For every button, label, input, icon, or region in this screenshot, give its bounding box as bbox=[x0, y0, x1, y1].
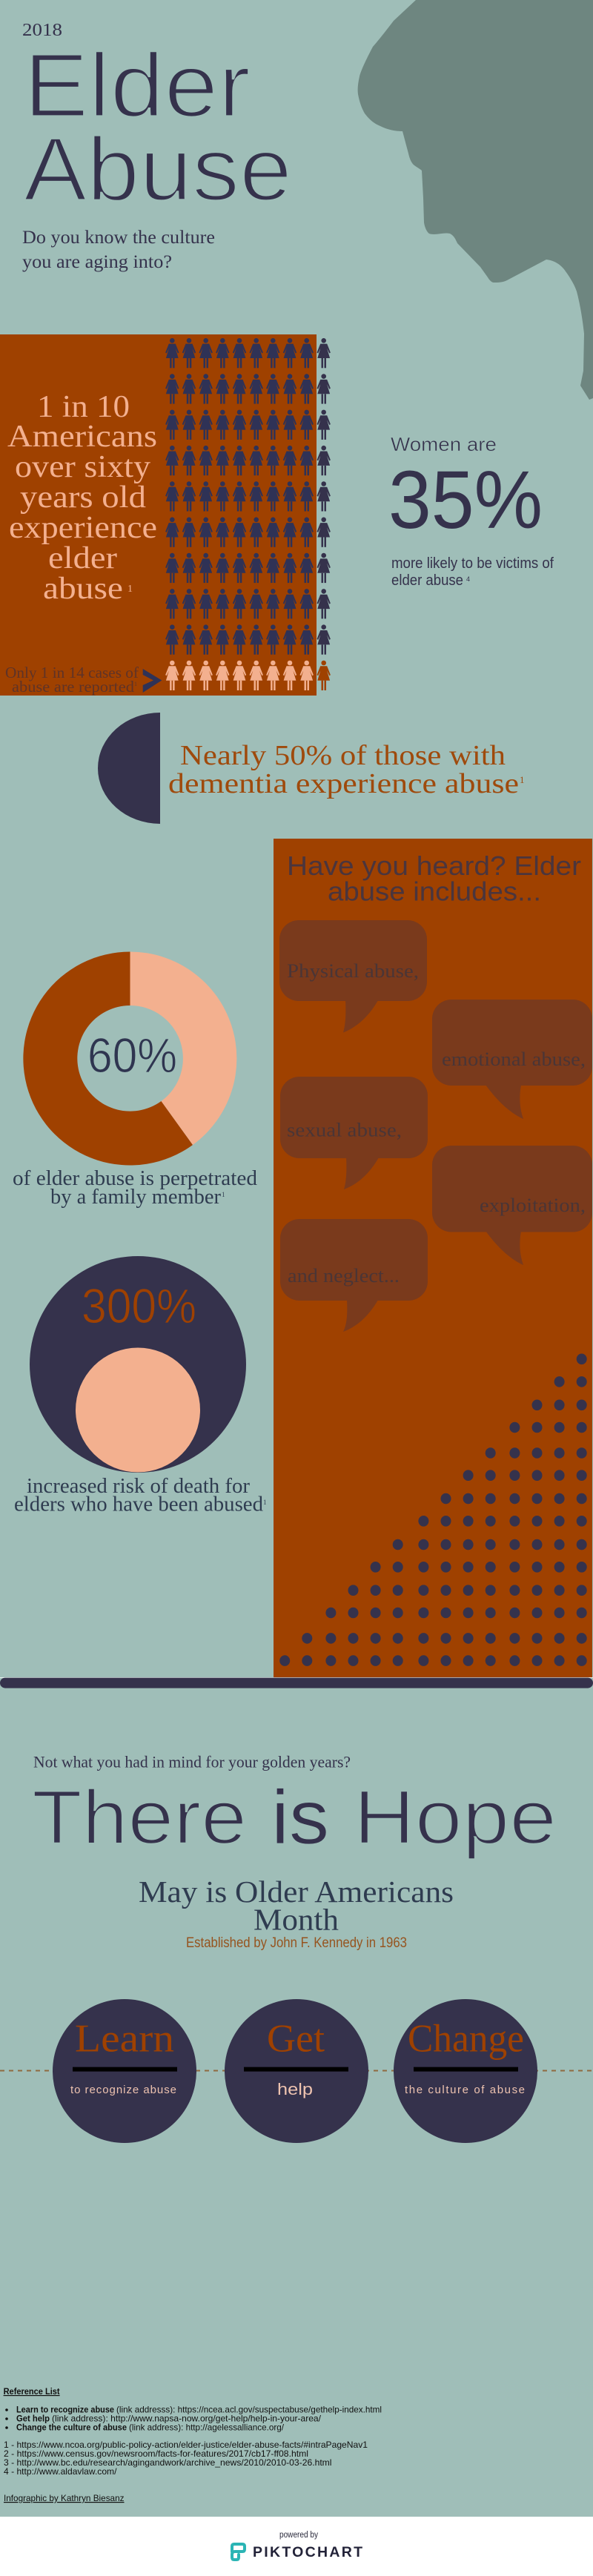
call to action: learn: Learn bbox=[75, 2017, 174, 2060]
statistic: women 35% bbox=[388, 433, 554, 589]
panel heading bbox=[287, 851, 581, 906]
300% caption: increased risk of death for bbox=[27, 1475, 251, 1498]
year: 2018 bbox=[22, 21, 62, 40]
headline statistic bbox=[7, 390, 157, 606]
heading: there is hope: There bbox=[32, 1774, 247, 1860]
inner circle bbox=[76, 1348, 200, 1473]
numbered sources: 2 - https://www.census.gov/newsroom/facts-for-features/2017/cb17-ff08.html bbox=[4, 2448, 308, 2459]
panel heading: abuse includes... bbox=[328, 876, 541, 906]
lead-in: Women are bbox=[391, 433, 497, 455]
other segment bbox=[130, 952, 236, 1145]
proportional circles: 300% bbox=[30, 1256, 246, 1473]
pictogram: 100 women bbox=[165, 338, 331, 690]
section divider bar bbox=[0, 1678, 593, 1688]
help links: (link addresss): https://ncea.acl.gov/suspectabuse/gethelp-index.html bbox=[116, 2404, 382, 2414]
call to action: learn bbox=[53, 1999, 196, 2143]
300% caption: elders who have been abused bbox=[14, 1493, 263, 1516]
dark figures, outside column bbox=[317, 338, 331, 655]
heading: there is hope: Hope bbox=[354, 1774, 557, 1860]
title: Elder bbox=[24, 35, 251, 136]
older americans month bbox=[139, 1875, 454, 1937]
headline statistic: over sixty bbox=[15, 450, 150, 484]
title: Abuse bbox=[24, 119, 292, 219]
speech bubble: exploitation bbox=[432, 1146, 592, 1265]
older americans month: Month bbox=[254, 1903, 339, 1937]
call to action: get help: help bbox=[277, 2080, 313, 2098]
percent label: 300% bbox=[82, 1278, 196, 1333]
big number: 35% bbox=[388, 455, 543, 546]
reported figure bbox=[317, 661, 331, 690]
heading: there is hope bbox=[32, 1774, 557, 1860]
speech bubble: neglect bbox=[280, 1219, 428, 1332]
older americans month: May is Older Americans bbox=[139, 1875, 454, 1909]
panel background bbox=[274, 839, 592, 1677]
dementia statistic bbox=[168, 740, 525, 799]
headline statistic: 1 in 10 bbox=[37, 390, 130, 424]
headline statistic: 1 bbox=[127, 584, 133, 595]
call to action: change culture bbox=[394, 1999, 537, 2143]
speech bubble: exploitation: exploitation, bbox=[480, 1195, 586, 1216]
dark figures, upper nine rows bbox=[165, 338, 314, 655]
speech bubble: emotional abuse bbox=[432, 1000, 592, 1119]
headline statistic: experience bbox=[9, 511, 157, 545]
help links: Learn to recognize abuse bbox=[16, 2404, 114, 2414]
headline statistic: years old bbox=[20, 480, 146, 515]
subtitle question bbox=[22, 228, 215, 272]
panel: 1 in 10 statistic bbox=[0, 334, 317, 696]
dot triangle pattern bbox=[279, 1354, 587, 1666]
reporting note: 1 bbox=[134, 681, 137, 687]
reference list bbox=[4, 2386, 382, 2503]
help links bbox=[5, 2404, 382, 2432]
speech bubble: physical abuse bbox=[279, 920, 427, 1032]
speech bubble: emotional abuse: emotional abuse, bbox=[442, 1048, 586, 1070]
call to action: learn: to recognize abuse bbox=[70, 2084, 176, 2096]
300% caption bbox=[14, 1475, 267, 1516]
panel background bbox=[0, 334, 317, 696]
outer circle bbox=[30, 1256, 246, 1473]
dementia statistic: 1 bbox=[520, 774, 525, 785]
help links: Get help bbox=[16, 2413, 50, 2423]
title bbox=[24, 35, 292, 219]
reporting note: abuse are reported bbox=[12, 678, 135, 696]
section lead-in: Not what you had in mind for your golden years? bbox=[33, 1753, 351, 1771]
highlighted row bbox=[165, 661, 314, 690]
call to action: change culture: Change bbox=[408, 2017, 524, 2060]
statistic: women 35%: elder abuse bbox=[391, 572, 463, 589]
donut caption bbox=[13, 1167, 257, 1209]
arrow bbox=[143, 669, 162, 693]
numbered sources: 1 - https://www.ncoa.org/public-policy-action/elder-justice/elder-abuse-facts/#intraPageNav1 bbox=[4, 2440, 368, 2450]
wordmark: PIKTOCHART bbox=[253, 2544, 362, 2560]
panel: types of abuse bbox=[274, 839, 592, 1677]
speech bubble: physical abuse: Physical abuse, bbox=[287, 960, 419, 982]
numbered sources bbox=[4, 2440, 368, 2477]
dementia statistic: Nearly 50% of those with bbox=[180, 740, 506, 771]
reference heading: Reference List bbox=[4, 2386, 60, 2397]
reporting note bbox=[5, 664, 139, 696]
powered by: powered by bbox=[279, 2531, 318, 2540]
donut caption: by a family member bbox=[50, 1186, 222, 1209]
dementia statistic: dementia experience abuse bbox=[168, 768, 519, 799]
description: more likely to be victims of bbox=[391, 555, 554, 572]
family member segment bbox=[23, 952, 193, 1166]
donut caption: of elder abuse is perpetrated bbox=[13, 1167, 257, 1190]
help links: Change the culture of abuse bbox=[16, 2422, 127, 2432]
call to action: get help: Get bbox=[267, 2017, 325, 2060]
footer branding bbox=[232, 2531, 362, 2560]
numbered sources: 3 - http://www.bc.edu/research/agingandwork/archive_news/2010/2010-03-26.html bbox=[4, 2457, 332, 2468]
headline statistic: Americans bbox=[7, 420, 157, 454]
author credit: Infographic by Kathryn Biesanz bbox=[4, 2493, 125, 2503]
percent label: 60% bbox=[87, 1028, 177, 1083]
donut chart: 60% bbox=[23, 952, 236, 1166]
heading: there is hope: is bbox=[271, 1774, 329, 1860]
headline statistic: elder bbox=[48, 541, 117, 575]
panel heading: Have you heard? Elder bbox=[287, 851, 581, 881]
subtitle question: you are aging into? bbox=[22, 252, 172, 272]
half circle bbox=[98, 713, 160, 824]
speech bubble: neglect: and neglect... bbox=[288, 1265, 400, 1287]
call to action: change culture: the culture of abuse bbox=[405, 2084, 525, 2096]
statistic: women 35%: 4 bbox=[466, 575, 470, 583]
speech bubble: sexual abuse bbox=[280, 1077, 428, 1189]
established note: Established by John F. Kennedy in 1963 bbox=[186, 1935, 407, 1951]
help links: (link address): http://www.napsa-now.org/get-help/help-in-your-area/ bbox=[52, 2413, 322, 2423]
speech bubble: sexual abuse: sexual abuse, bbox=[287, 1120, 402, 1140]
numbered sources: 4 - http://www.aldavlaw.com/ bbox=[4, 2466, 117, 2477]
silhouette of elderly head bbox=[358, 0, 593, 400]
donut caption: 1 bbox=[222, 1191, 225, 1198]
icon: piktochart logo bbox=[232, 2544, 245, 2560]
call to action: get help bbox=[225, 1999, 368, 2143]
300% caption: 1 bbox=[263, 1499, 267, 1506]
reporting note: Only 1 in 14 cases of bbox=[5, 664, 139, 681]
help links: (link address): http://agelessalliance.org/ bbox=[129, 2422, 285, 2432]
subtitle question: Do you know the culture bbox=[22, 228, 215, 248]
headline statistic: abuse bbox=[43, 572, 123, 606]
